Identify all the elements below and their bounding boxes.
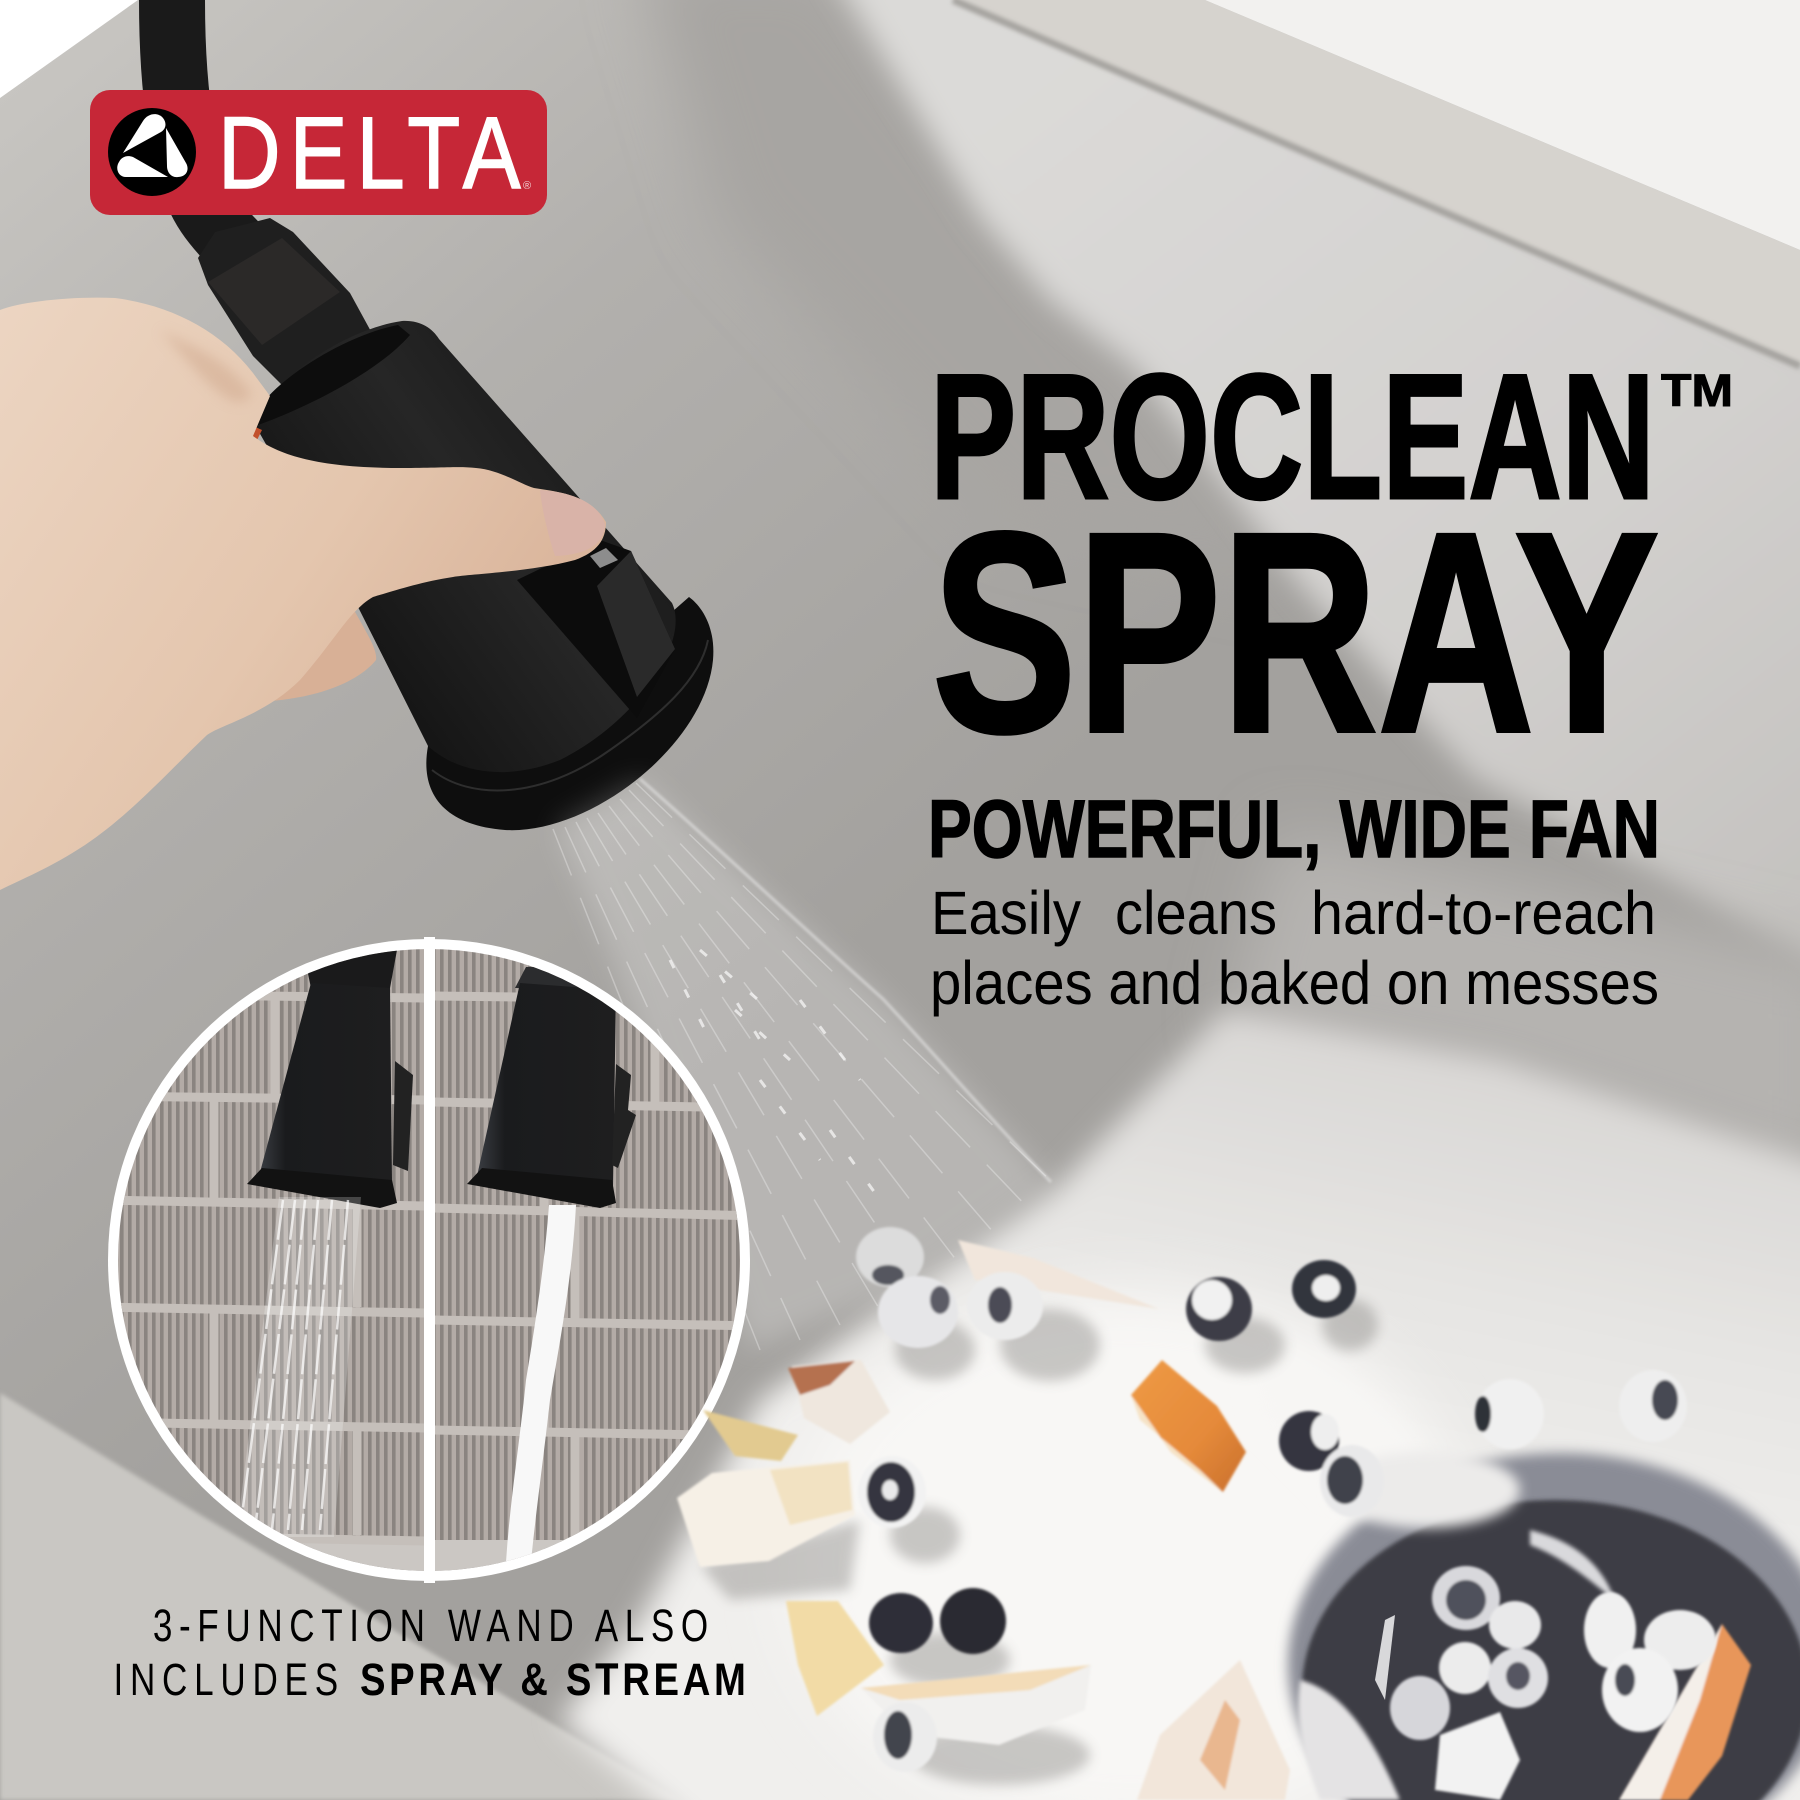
description <box>930 879 1659 1017</box>
foam left <box>1375 1615 1395 1700</box>
berry <box>967 1272 1043 1340</box>
caption: SPRAY & STREAM <box>360 1654 746 1705</box>
registered mark: ® <box>523 180 531 192</box>
spray wand head <box>198 218 713 830</box>
mess orange <box>1200 1700 1240 1790</box>
yellow slice <box>786 1601 884 1716</box>
caption: INCLUDES <box>113 1654 338 1705</box>
drain <box>1288 1452 1800 1800</box>
berry <box>856 1227 924 1287</box>
connector <box>198 218 392 415</box>
berry <box>1292 1260 1356 1318</box>
knuckle shade <box>160 330 252 402</box>
bottom apple mess <box>1137 1660 1290 1800</box>
apple pieces <box>677 1240 1751 1800</box>
top ring <box>258 325 410 425</box>
berry <box>1475 1379 1544 1449</box>
thumb nail <box>540 490 605 556</box>
wedge top flesh <box>861 1665 1091 1700</box>
spray water <box>236 1197 361 1537</box>
description: cleans <box>1115 879 1277 947</box>
drain apple wedge <box>1619 1624 1751 1800</box>
left faucet head <box>247 950 413 1208</box>
nozzle flange <box>426 597 713 830</box>
foam over drain rim <box>1330 1452 1520 1528</box>
logo icon: three-blade triangle <box>108 108 196 196</box>
description: places and baked on messes <box>930 949 1659 1017</box>
wedge foam <box>1619 1624 1722 1800</box>
chunk skin <box>788 1361 855 1395</box>
berry <box>873 1702 937 1772</box>
wand body <box>255 321 676 772</box>
switch face <box>597 551 675 697</box>
small yellow piece <box>703 1410 798 1461</box>
berry <box>1186 1277 1252 1341</box>
white flake <box>958 1240 1159 1309</box>
white chunk with skin <box>792 1360 890 1444</box>
switch highlight <box>590 548 618 568</box>
chunk tint <box>770 1462 852 1525</box>
orange apple wedge <box>1131 1360 1246 1492</box>
water spray fan <box>553 779 1055 1350</box>
wedge flesh <box>1131 1395 1223 1492</box>
rim highlight <box>432 640 708 790</box>
food debris shadows <box>700 1299 1378 1785</box>
wordmark: DELTA <box>218 96 521 211</box>
red strip behind fingers <box>240 420 355 625</box>
tile wall <box>118 949 740 1571</box>
blueberries covered in foam <box>856 1227 1716 1800</box>
berry <box>1320 1445 1384 1517</box>
foam streak <box>1530 1530 1615 1600</box>
berry <box>940 1588 1006 1654</box>
knurled collar <box>208 238 340 345</box>
description: hard-to-reach <box>1311 879 1656 947</box>
hand holding wand <box>0 298 606 890</box>
caption <box>113 1600 746 1705</box>
inset circle: spray and stream modes <box>100 930 760 1590</box>
caption: 3-FUNCTION WAND ALSO <box>153 1600 708 1651</box>
berry <box>1279 1411 1339 1471</box>
foam over drain edge <box>1298 1680 1400 1800</box>
berry <box>878 1276 958 1348</box>
creamy chunk <box>677 1460 855 1567</box>
trademark symbol: TM <box>1661 365 1733 416</box>
hand and thumb <box>0 298 606 890</box>
dark drain opening <box>1302 1500 1800 1800</box>
counter below tile <box>301 1540 564 1571</box>
spray streaks <box>553 783 1055 1350</box>
stream water <box>506 1205 576 1562</box>
Delta logo badge <box>90 90 547 215</box>
center divider <box>424 937 435 1583</box>
fingers under <box>220 603 376 702</box>
spray droplets <box>670 950 880 1200</box>
right faucet head <box>467 967 636 1208</box>
description: Easily <box>931 879 1081 947</box>
bottom wedge <box>861 1665 1091 1745</box>
fan edge streak <box>640 779 1051 1182</box>
berries in drain <box>1390 1566 1716 1800</box>
faucet hose <box>172 0 240 250</box>
berry <box>858 1456 926 1528</box>
thumb switch <box>517 540 675 718</box>
berry <box>1619 1370 1687 1442</box>
berry <box>869 1593 933 1653</box>
